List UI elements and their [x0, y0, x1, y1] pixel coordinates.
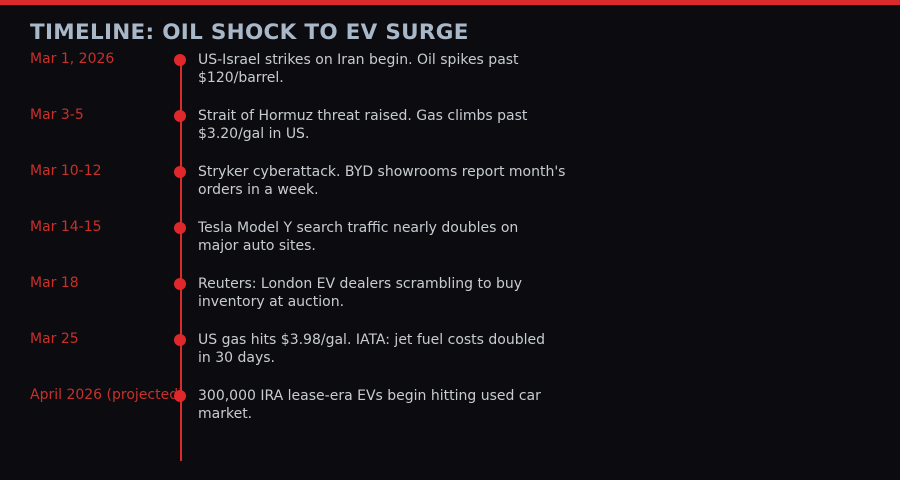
event: Mar 14-15: Mar 14-15	[30, 219, 102, 235]
event: April 2026: market.	[198, 406, 252, 422]
event: Mar 14-15: major auto sites.	[198, 238, 316, 254]
event: Mar 3-5: $3.20/gal in US.	[198, 126, 309, 142]
event: Mar 25: in 30 days.	[198, 350, 275, 366]
event: Mar 1: US-Israel strikes on Iran begin. Oil spikes past	[198, 52, 519, 68]
event: April 2026	[30, 387, 541, 422]
event: Mar 25	[30, 331, 545, 366]
timeline line	[180, 60, 182, 461]
event: Mar 1	[30, 51, 519, 86]
event: Mar 3-5: Mar 3-5	[30, 107, 84, 123]
event: Mar 1: Mar 1, 2026	[30, 51, 114, 67]
event: Mar 25: US gas hits $3.98/gal. IATA: jet fuel costs doubled	[198, 332, 545, 348]
event: Mar 25: Mar 25	[30, 331, 79, 347]
event: April 2026: 300,000 IRA lease-era EVs begin hitting used car	[198, 388, 541, 404]
event: Mar 1: $120/barrel.	[198, 70, 284, 86]
event: Mar 18: Mar 18	[30, 275, 79, 291]
event: Mar 14-15	[30, 219, 518, 254]
event: April 2026: April 2026 (projected)	[30, 387, 184, 403]
event: Mar 10-12: orders in a week.	[198, 182, 319, 198]
title: TIMELINE: OIL SHOCK TO EV SURGE	[30, 20, 469, 45]
event: Mar 3-5: Strait of Hormuz threat raised. Gas climbs past	[198, 108, 527, 124]
event: Mar 10-12	[30, 163, 565, 198]
event: Mar 10-12: Stryker cyberattack. BYD showrooms report month's	[198, 164, 565, 180]
event: Mar 10-12: Mar 10-12	[30, 163, 102, 179]
event: Mar 18	[30, 275, 522, 310]
event: Mar 14-15: Tesla Model Y search traffic nearly doubles on	[198, 220, 518, 236]
event: Mar 3-5	[30, 107, 528, 142]
event: Mar 18: Reuters: London EV dealers scrambling to buy	[198, 276, 522, 292]
event: Mar 18: inventory at auction.	[198, 294, 344, 310]
